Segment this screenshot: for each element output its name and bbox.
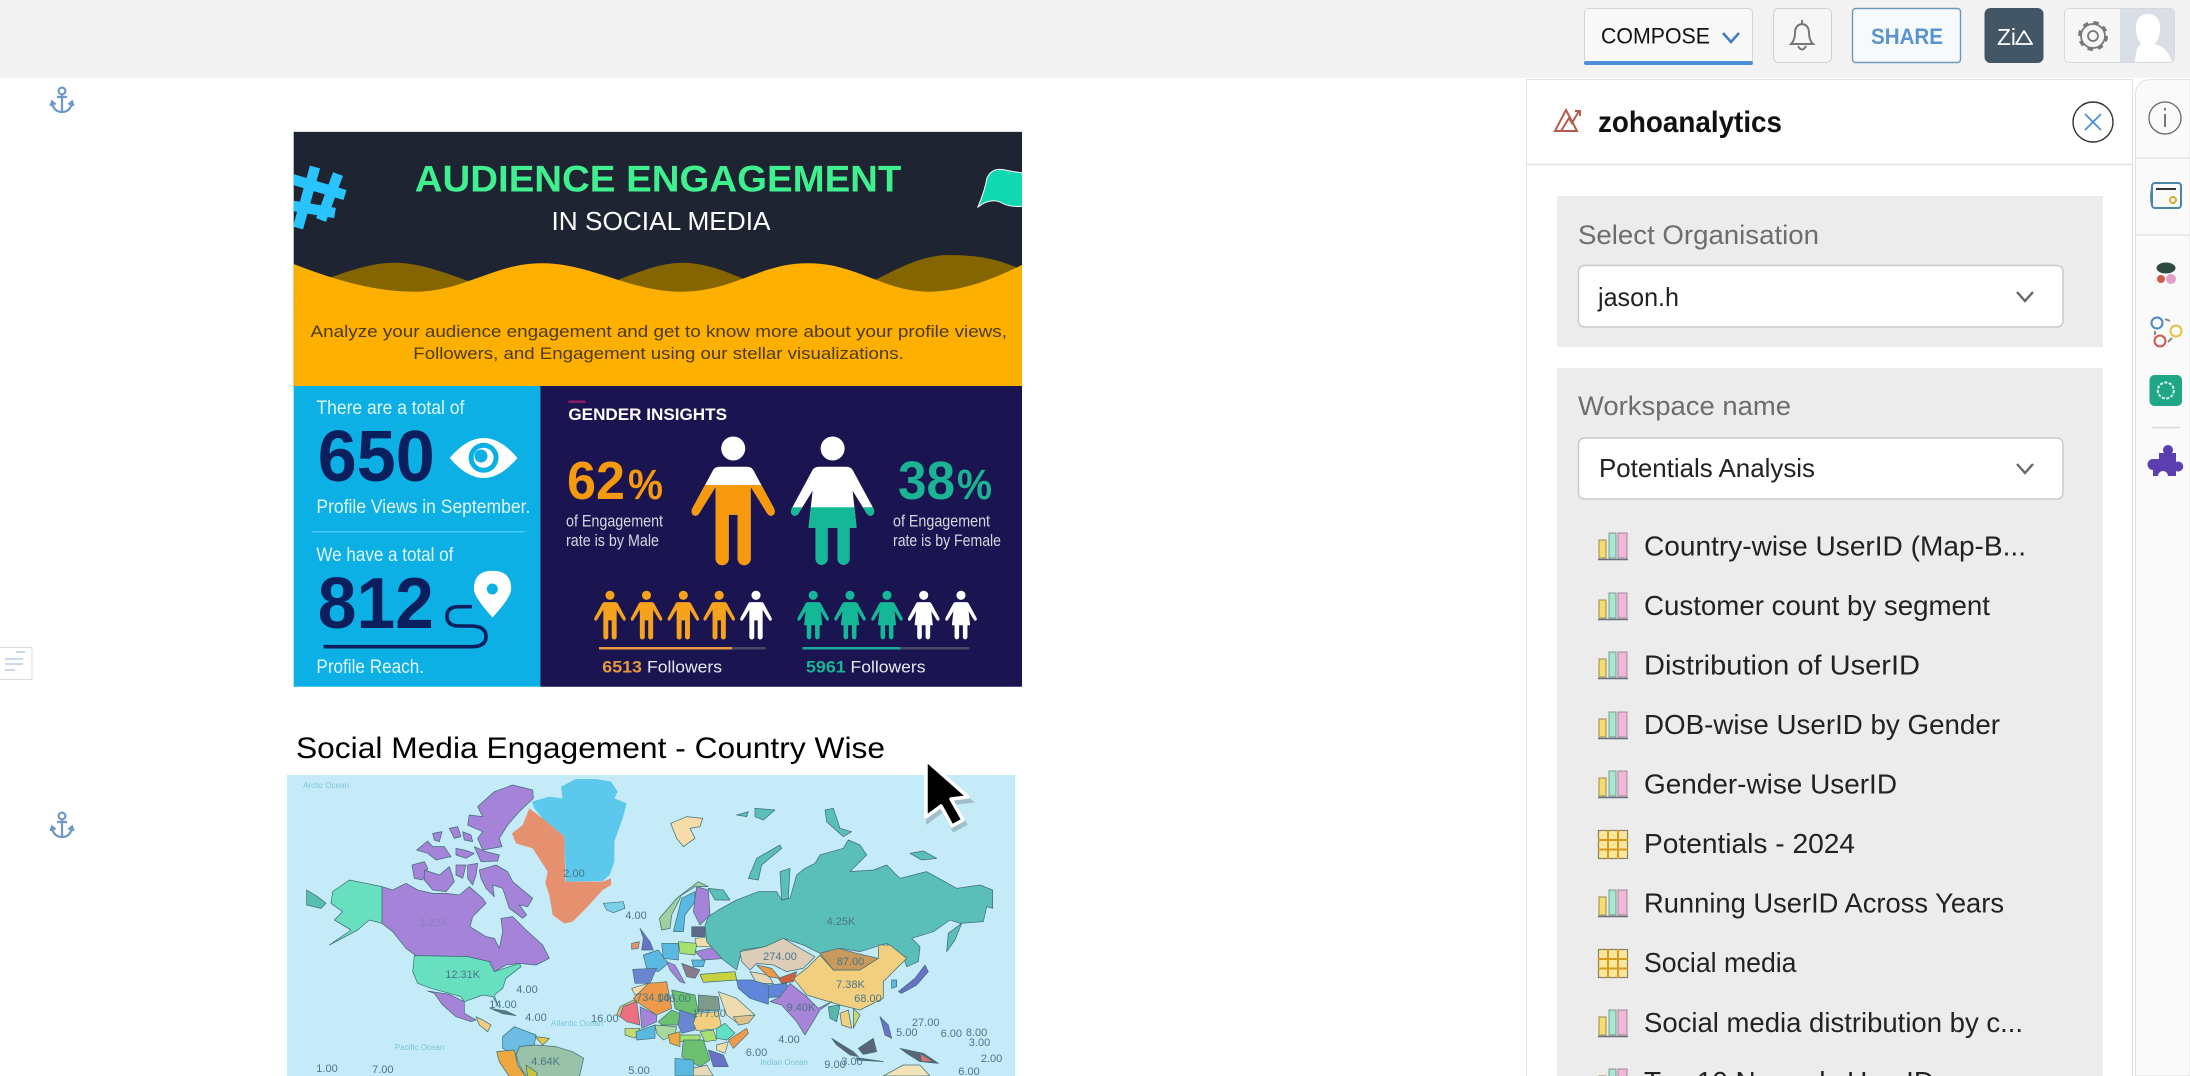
map value labels: 27.00 <box>912 1017 939 1029</box>
map value labels: 146.00 <box>657 993 691 1005</box>
map value labels: 3.00 <box>841 1056 863 1068</box>
text: 6513 followers: Followers <box>647 658 722 676</box>
intro text: Followers, and Engagement using our stellar visualizations. <box>413 344 904 363</box>
map value labels: 4.00 <box>778 1034 800 1046</box>
map value labels: 6.00 <box>746 1047 767 1059</box>
text: profile reach: Profile Reach. <box>316 657 424 678</box>
dropdown: workspace <box>1578 438 2063 499</box>
map value labels: 5.00 <box>896 1027 918 1039</box>
icon: stacked shapes <box>2156 262 2176 284</box>
icon: connected circles <box>2152 318 2182 346</box>
dropdown: organisation: jason.h <box>1597 282 1679 312</box>
list item: running userid: Running UserID Across Years <box>1644 888 2004 918</box>
front wave banner <box>294 263 1022 388</box>
icon: zoho analytics logo <box>1555 110 1580 131</box>
figure: male 62 percent <box>692 436 775 565</box>
text: 6513 followers: 6513 <box>602 658 642 676</box>
map value labels: 8.00 <box>966 1027 987 1039</box>
map value labels: 3.00 <box>969 1037 990 1049</box>
heading: gender insights: GENDER INSIGHTS <box>568 405 727 424</box>
compose button: COMPOSE <box>1601 24 1710 48</box>
list item: gender-wise: Gender-wise UserID <box>1644 768 1897 800</box>
map value labels: 9.40K <box>787 1002 816 1014</box>
icon: close button <box>2073 102 2113 142</box>
number: 812: 812 <box>318 564 434 644</box>
heading: zohoanalytics: zohoanalytics <box>1598 106 1782 139</box>
map value labels: 1.00 <box>316 1063 338 1075</box>
map value labels: 4.00 <box>525 1012 547 1024</box>
map value labels: 68.00 <box>854 993 882 1005</box>
heading: map title: Social Media Engagement - Country Wise <box>296 732 885 765</box>
chart: world map <box>287 775 1015 1076</box>
map value labels: 14.00 <box>489 999 517 1011</box>
map value labels: 6.00 <box>941 1028 962 1040</box>
icon: hashtag <box>288 167 345 228</box>
icon: chatgpt <box>2150 375 2182 406</box>
progress bar: female followers <box>802 647 969 650</box>
side rail <box>2136 80 2190 1076</box>
share button <box>1852 8 1960 62</box>
list item: social media: Social media <box>1644 947 1797 978</box>
pictogram: female followers <box>797 591 977 639</box>
stat: 38 percent female <box>894 461 1000 550</box>
anchor icon <box>50 88 74 112</box>
map value labels: 9.00 <box>824 1059 846 1071</box>
icon: route line <box>324 607 486 647</box>
share button: SHARE <box>1871 24 1943 49</box>
text: profile views: Profile Views in September. <box>316 497 530 518</box>
intro text <box>310 322 1007 363</box>
map value labels <box>316 868 1002 1076</box>
map value labels: 177.00 <box>692 1008 726 1020</box>
map: americas <box>307 779 627 1076</box>
text: there are a total of: There are a total of <box>316 398 465 419</box>
zia button: Zi <box>1997 24 2016 50</box>
map value labels: 4.00 <box>625 910 647 922</box>
map value labels: 4.25K <box>827 916 856 928</box>
subtitle: IN SOCIAL MEDIA <box>552 208 770 236</box>
map value labels: 7.00 <box>372 1064 394 1076</box>
map value labels: 2.00 <box>981 1053 1002 1065</box>
text: we have a total of: We have a total of <box>316 545 454 566</box>
panel: gender insights <box>540 386 1022 687</box>
map ocean labels: Pacific Ocean <box>395 1043 444 1052</box>
icon: location pin <box>474 571 511 618</box>
dropdown: organisation <box>1578 266 2063 327</box>
icon: puzzle piece <box>2148 445 2183 476</box>
text: 6513 followers <box>602 660 722 672</box>
pictogram: male followers <box>594 591 772 640</box>
panel: reach stats <box>294 386 540 687</box>
panel: select organisation <box>1557 196 2103 347</box>
top toolbar <box>0 0 2190 78</box>
stat: 62 percent male: 62 <box>567 451 625 511</box>
icon: info <box>2149 102 2181 134</box>
intro text: Analyze your audience engagement and get to know more about your profile views, <box>310 322 1007 341</box>
map value labels: 87.00 <box>837 956 864 968</box>
dropdown: workspace: Potentials Analysis <box>1599 453 1815 483</box>
map value labels: 16.00 <box>591 1013 619 1025</box>
stat: 62 percent male: % <box>628 461 663 509</box>
infographic: audience engagement <box>288 132 1024 687</box>
stat: 62 percent male: rate is by Male <box>566 531 659 550</box>
panel: zoho analytics sidebar <box>1526 80 2132 1076</box>
icon: notebook <box>2151 183 2181 208</box>
list item: country-wise: Country-wise UserID (Map-B... <box>1644 530 2026 562</box>
label: select organisation: Select Organisation <box>1578 220 1819 250</box>
number: 650: 650 <box>318 417 435 497</box>
text block handle icon <box>0 648 32 680</box>
map value labels: 734.00 <box>636 992 670 1004</box>
list item: customer count: Customer count by segment <box>1644 590 1990 621</box>
back wave <box>294 255 1022 310</box>
map value labels: 12.31K <box>445 969 481 981</box>
stat: 38 percent female: % <box>957 461 992 509</box>
figure: female 38 percent <box>791 436 874 565</box>
map value labels: 4.00 <box>516 984 538 996</box>
map ocean labels: Indian Ocean <box>760 1058 808 1067</box>
settings and avatar <box>2064 8 2174 62</box>
title: AUDIENCE ENGAGEMENT <box>415 158 902 200</box>
map: europe and africa <box>603 902 755 1076</box>
icon: flag <box>978 169 1024 207</box>
stat: 38 percent female: 38 <box>898 451 955 511</box>
list item: social media distribution: Social media distribution by c... <box>1644 1007 2023 1038</box>
map value labels: 4.64K <box>531 1056 561 1068</box>
compose button <box>1584 8 1753 65</box>
anchor icon <box>50 813 74 837</box>
map value labels: 1.23K <box>420 917 449 929</box>
icon: mouse cursor <box>926 760 970 830</box>
list item: dob-wise: DOB-wise UserID by Gender <box>1644 709 2000 740</box>
stat: 38 percent female: rate is by Female <box>893 531 1001 550</box>
text: 5961 followers: Followers <box>850 658 926 676</box>
map ocean labels: Arctic Ocean <box>303 781 349 790</box>
stat: 62 percent male: of Engagement <box>566 512 663 530</box>
map value labels: 7.38K <box>836 979 866 991</box>
map value labels: 274.00 <box>763 951 797 963</box>
map: asia <box>659 808 993 1076</box>
map ocean labels <box>303 781 808 1067</box>
notification bell button <box>1774 8 1832 62</box>
text: 5961 followers <box>806 660 925 672</box>
stat: 62 percent male <box>566 462 663 550</box>
panel: workspace list <box>1557 368 2103 1076</box>
map value labels: 2.00 <box>563 868 585 880</box>
stat: 38 percent female: of Engagement <box>893 512 990 530</box>
list item: distribution: Distribution of UserID <box>1644 650 1920 680</box>
progress bar: male followers <box>599 647 766 650</box>
map ocean labels: Atlantic Ocean <box>551 1019 603 1028</box>
zia button <box>1984 8 2044 63</box>
label: workspace name: Workspace name <box>1578 391 1791 421</box>
icon: eye <box>450 438 518 478</box>
text: 5961 followers: 5961 <box>806 658 846 676</box>
list item: potentials 2024: Potentials - 2024 <box>1644 828 1855 859</box>
